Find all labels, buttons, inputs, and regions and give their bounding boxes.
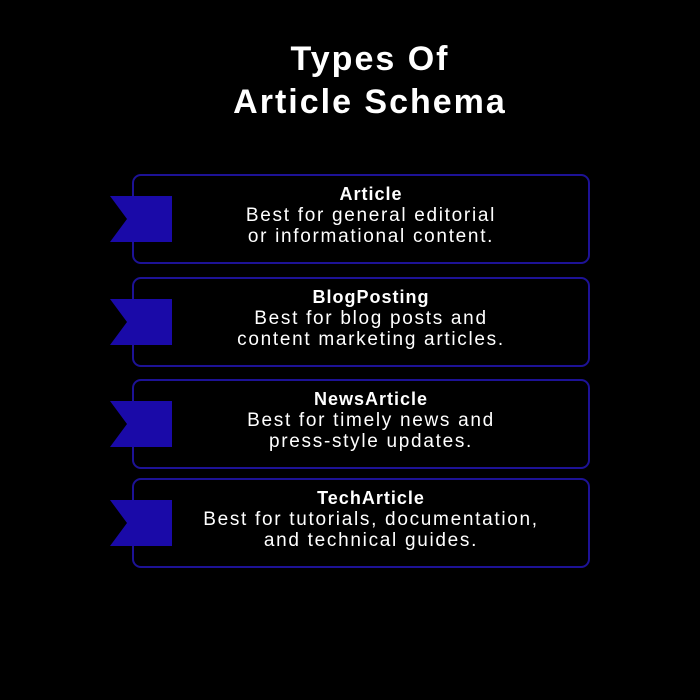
text: NewsArticle: Best for timely news and xyxy=(247,410,495,431)
text: TechArticle: Best for tutorials, documentation, xyxy=(203,509,539,530)
icon: ribbon xyxy=(110,500,172,546)
icon: ribbon xyxy=(110,196,172,242)
text: NewsArticle: NewsArticle xyxy=(314,389,428,409)
panel: Article xyxy=(110,174,590,264)
text: BlogPosting: content marketing articles. xyxy=(237,329,505,350)
panel: NewsArticle xyxy=(110,379,590,469)
title: Article Schema xyxy=(233,83,507,121)
text: TechArticle xyxy=(203,488,539,551)
text: TechArticle: TechArticle xyxy=(317,488,425,508)
icon: ribbon xyxy=(110,299,172,345)
text: Article: Best for general editorial xyxy=(246,205,496,226)
title xyxy=(233,40,507,121)
text: BlogPosting: BlogPosting xyxy=(312,287,430,307)
text: Article xyxy=(246,184,496,247)
icon: ribbon xyxy=(110,401,172,447)
text: Article: or informational content. xyxy=(248,226,494,247)
text: TechArticle: and technical guides. xyxy=(264,530,478,551)
panel: BlogPosting xyxy=(110,277,590,367)
text: BlogPosting xyxy=(237,287,505,350)
title: Types Of xyxy=(291,40,449,78)
panel: TechArticle xyxy=(110,478,590,568)
text: NewsArticle: press-style updates. xyxy=(269,431,473,452)
text: Article: Article xyxy=(339,184,403,204)
text: NewsArticle xyxy=(247,389,495,452)
text: BlogPosting: Best for blog posts and xyxy=(254,308,488,329)
